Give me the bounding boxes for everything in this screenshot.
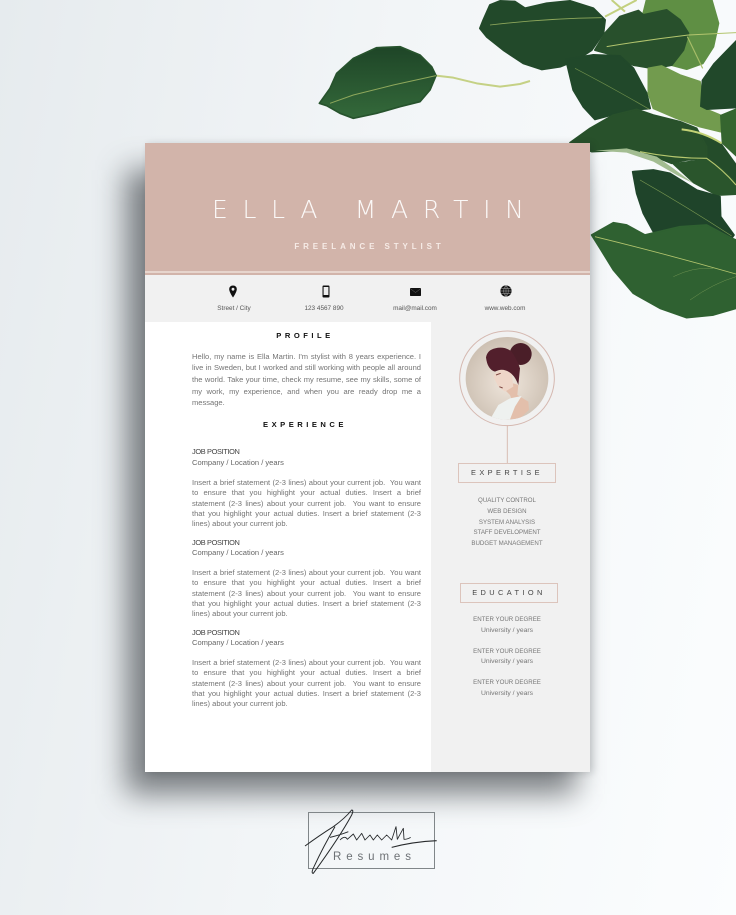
- job 2: JOB POSITION: [192, 538, 240, 547]
- contact: email: mail@mail.com: [393, 305, 437, 312]
- expertise list: STAFF DEVELOPMENT: [473, 529, 541, 536]
- dark leaf top left: [480, 1, 605, 69]
- job 2: statement (2-3 lines) about your current job. You want to ensure: [192, 589, 421, 598]
- education list: University / years: [481, 658, 533, 665]
- job 1: Insert a brief statement (2-3 lines) about your current job. You want: [192, 478, 421, 487]
- icon: mail: [410, 288, 421, 296]
- job 2: Insert a brief statement (2-3 lines) about your current job. You want: [192, 568, 421, 577]
- leaf D: [566, 55, 650, 119]
- leaf: left single leaf with stem: [319, 47, 530, 118]
- portrait with ring and connector: [459, 330, 555, 463]
- icon: phone: [322, 286, 330, 298]
- logo: [304, 810, 437, 874]
- profile text: [192, 352, 421, 407]
- document shadow: [126, 170, 576, 794]
- job 3: to ensure that you highlight your actual duties. Insert a brief: [192, 668, 421, 677]
- education list: ENTER YOUR DEGREE: [473, 648, 541, 654]
- pale leaf E: [648, 66, 721, 132]
- job 1: statement (2-3 lines) about your current job. You want to ensure: [192, 499, 421, 508]
- profile text: the world. Take your time, check my resume, see my skills, some of: [192, 375, 421, 384]
- expertise label: [458, 463, 556, 483]
- education label: EDUCATION: [472, 588, 546, 597]
- leaf J: [633, 170, 734, 238]
- expertise list: WEB DESIGN: [487, 508, 527, 515]
- education list: [473, 616, 541, 696]
- icon: location pin: [229, 286, 237, 298]
- leaf cluster right: [480, 0, 736, 318]
- expertise list: QUALITY CONTROL: [478, 497, 536, 504]
- profile text: message.: [192, 398, 225, 407]
- expertise label: EXPERTISE: [471, 468, 543, 477]
- heading: profile: PROFILE: [276, 331, 334, 340]
- subtitle: FREELANCE STYLIST: [294, 242, 445, 251]
- contact: website: www.web.com: [485, 305, 525, 312]
- job 3: that you highlight your actual duties. Insert a brief statement (2-3: [192, 689, 421, 698]
- heading: experience: EXPERIENCE: [263, 420, 347, 429]
- leaf F right edge: [700, 40, 736, 110]
- icon: globe: [500, 285, 512, 297]
- job 2: that you highlight your actual duties. Insert a brief statement (2-3: [192, 599, 421, 608]
- job 2: lines) about your current job.: [192, 609, 288, 618]
- job 3: JOB POSITION: [192, 628, 240, 637]
- light leaf top: [643, 0, 718, 69]
- dark leaf top middle: [595, 10, 688, 68]
- resume document: [145, 143, 590, 772]
- job 1: Company / Location / years: [192, 458, 284, 467]
- job 3: lines) about your current job.: [192, 699, 288, 708]
- pale underside strip: [595, 148, 693, 183]
- job 1: JOB POSITION: [192, 447, 240, 456]
- expertise list: SYSTEM ANALYSIS: [479, 518, 535, 526]
- job 3: Insert a brief statement (2-3 lines) about your current job. You want: [192, 658, 421, 667]
- leaf H large middle: [700, 133, 736, 185]
- job 2: to ensure that you highlight your actual duties. Insert a brief: [192, 578, 421, 587]
- job 1: lines) about your current job.: [192, 519, 288, 528]
- logo signature: [304, 810, 437, 874]
- job 1: [192, 447, 421, 528]
- profile text: live in Sweden, but I worked and still working with people all around: [192, 363, 421, 372]
- education label: [460, 583, 558, 603]
- expertise list: [471, 497, 543, 546]
- education list: University / years: [481, 626, 533, 634]
- expertise list: BUDGET MANAGEMENT: [471, 540, 543, 546]
- left white column: [145, 322, 431, 772]
- job 3: statement (2-3 lines) about your current job. You want to ensure: [192, 679, 421, 688]
- leaf G right edge: [720, 108, 736, 157]
- logo wordmark: Resumes: [333, 851, 416, 863]
- job 3: Company / Location / years: [192, 638, 284, 647]
- contact: street: Street / City: [217, 305, 251, 312]
- job 3: [192, 628, 421, 708]
- profile text: Hello, my name is Ella Martin. I'm stylist with 8 years experience. I: [192, 352, 421, 360]
- profile text: my work, my experience, and when you are ready drop me a: [192, 387, 421, 396]
- education list: University / years: [481, 690, 533, 696]
- header band: [145, 143, 590, 275]
- job 2: Company / Location / years: [192, 548, 284, 557]
- header rule: [145, 271, 590, 272]
- education list: ENTER YOUR DEGREE: [473, 616, 541, 623]
- contact row: [217, 285, 526, 312]
- job 1: that you highlight your actual duties. Insert a brief statement (2-3: [192, 509, 421, 518]
- job 1: to ensure that you highlight your actual duties. Insert a brief: [192, 488, 421, 497]
- contact: phone number: 123 4567 890: [304, 305, 344, 312]
- name heading: ELLA MARTIN: [212, 195, 539, 224]
- logo frame: [308, 812, 435, 869]
- leaf K bottom: [592, 223, 736, 318]
- job 2: [192, 538, 421, 618]
- education list: ENTER YOUR DEGREE: [473, 679, 541, 686]
